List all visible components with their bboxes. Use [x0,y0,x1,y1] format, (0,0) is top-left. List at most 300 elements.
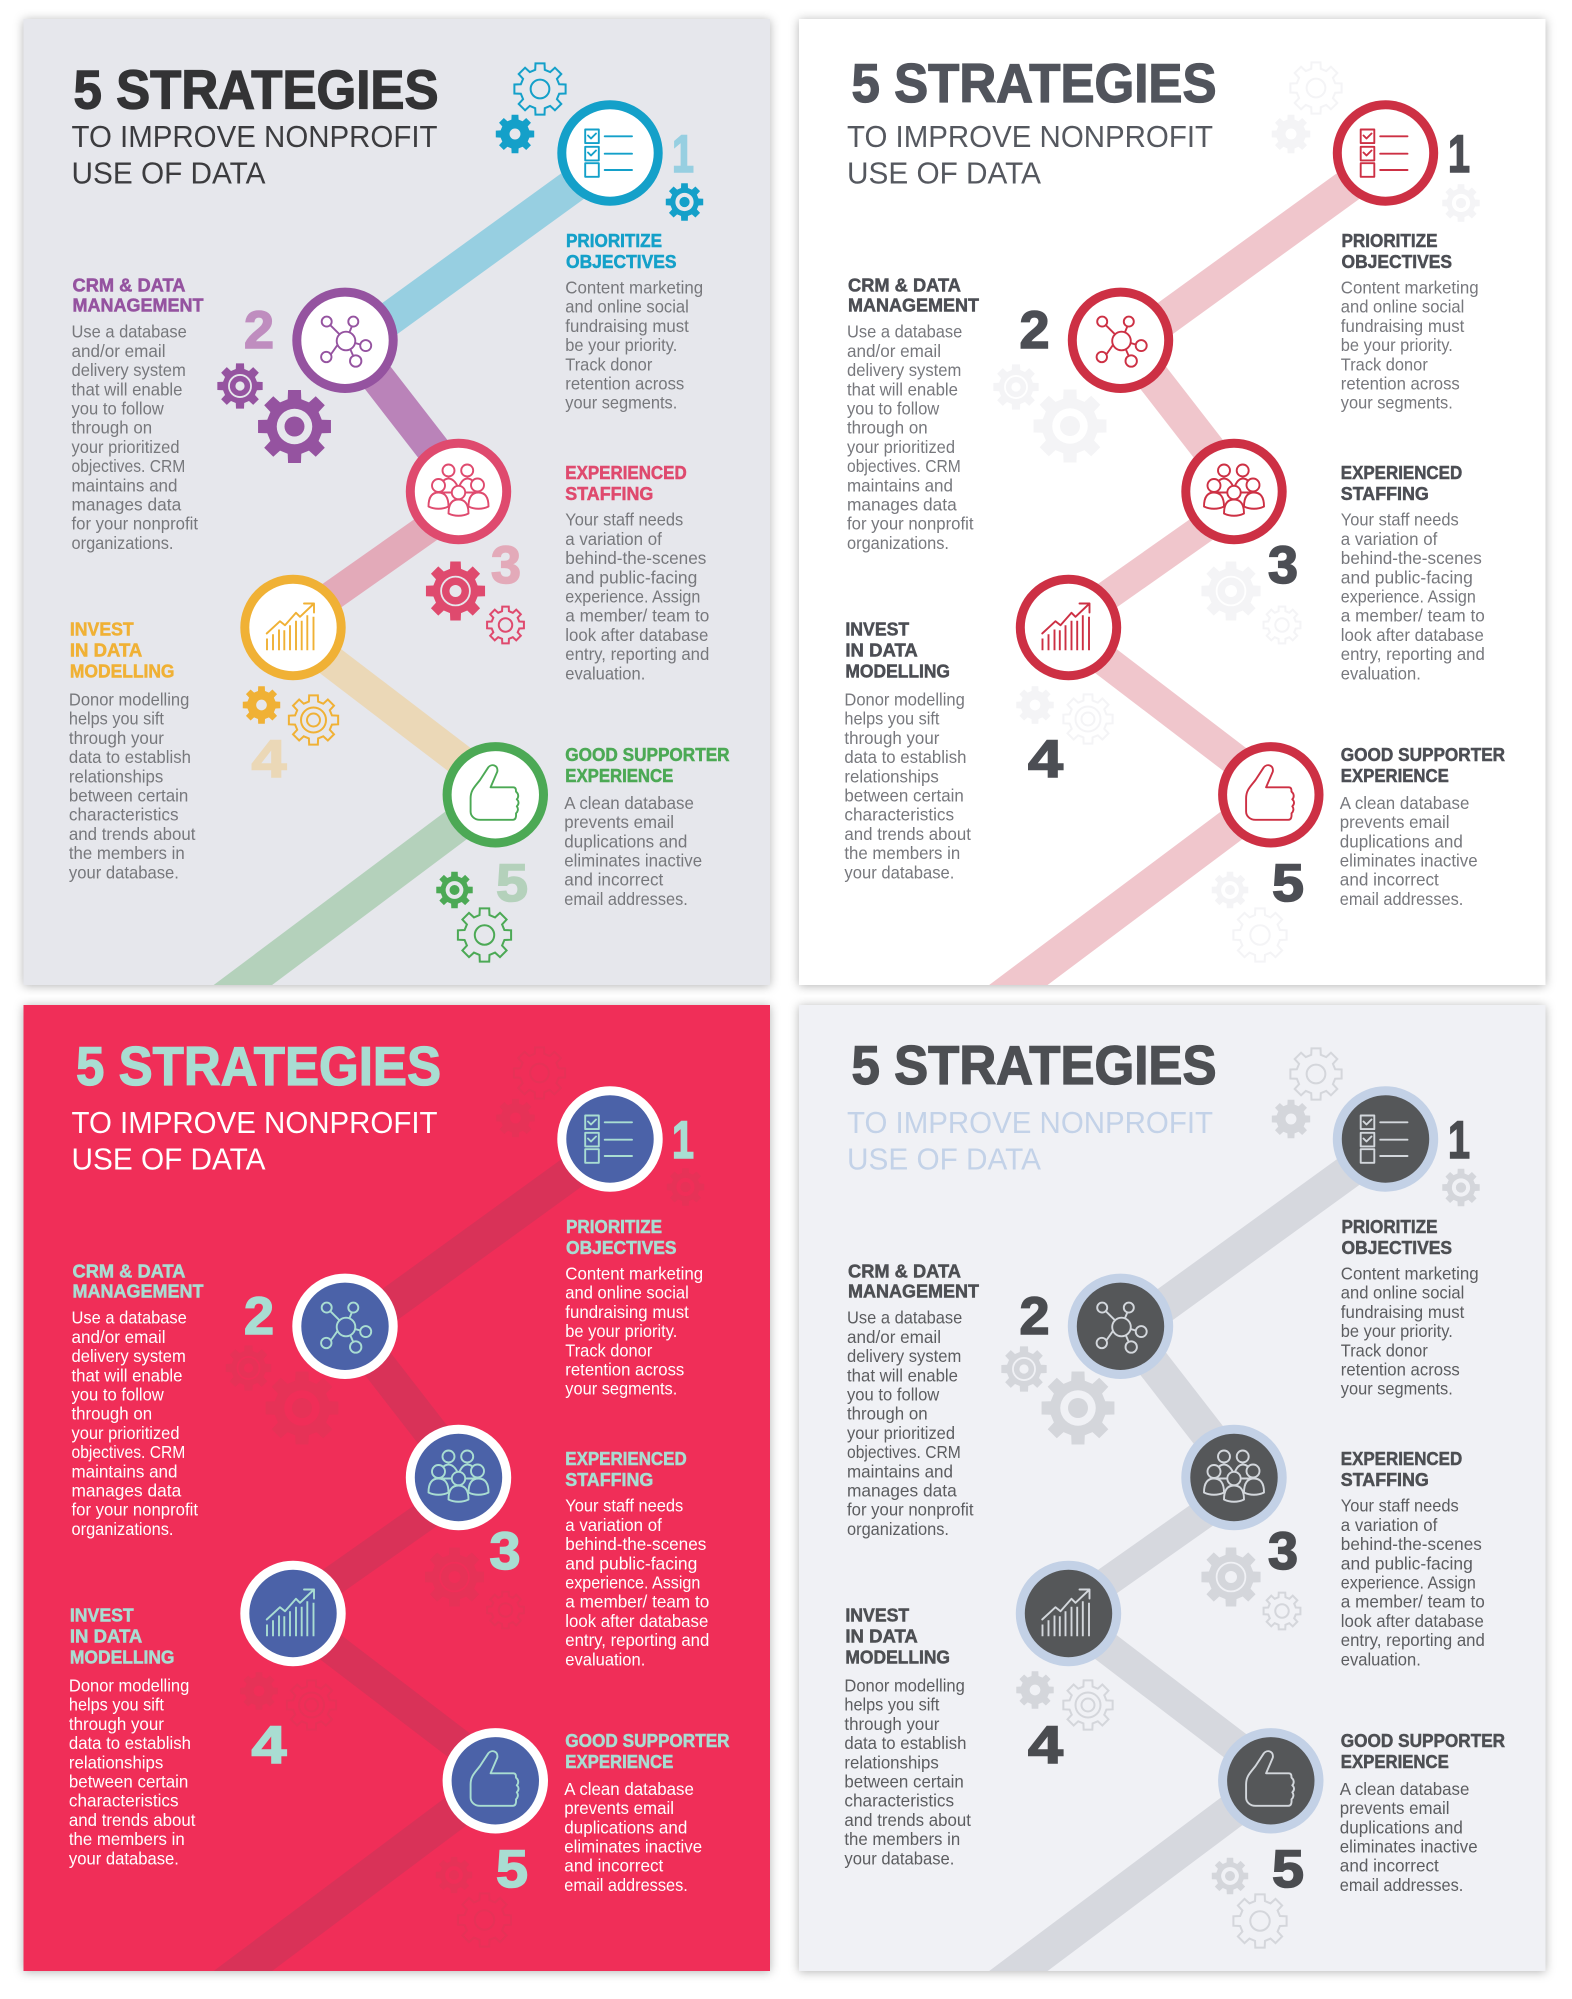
gears 5 [1212,872,1287,962]
road path [214,173,584,985]
subtitle [72,119,438,190]
body: good supporter experience: email addresses. [1340,889,1463,909]
body: invest in data modelling: through your [844,1714,940,1734]
body: prioritize objectives: retention across [1341,374,1460,394]
heading: prioritize objectives: PRIORITIZE [566,231,662,251]
body: CRM and data management: delivery system [72,1346,186,1366]
heading: CRM and data management: MANAGEMENT [848,296,979,316]
body: invest in data modelling: data to establish [69,747,191,767]
body: invest in data modelling: and trends about [844,824,971,844]
body: CRM and data management: organizations. [72,1519,174,1539]
body: prioritize objectives: fundraising must [1341,1302,1464,1322]
number 2: 2 [1020,301,1050,360]
icon: thumbs up [471,1751,519,1806]
heading: experienced staffing: EXPERIENCED [565,463,687,483]
icon: checklist [585,130,632,177]
step 3: experienced staffing [1186,1429,1485,1669]
icon: network [1097,317,1147,367]
body: prioritize objectives: and online social [1341,297,1464,317]
body: invest in data modelling: characteristics [844,805,954,825]
body: CRM and data management: for your nonprofit [72,514,198,534]
gears 4 [243,686,338,745]
body: CRM and data management: manages data [72,1480,181,1500]
body: experienced staffing: experience. Assign [1341,586,1476,606]
heading: experienced staffing [565,463,687,504]
body: invest in data modelling: your database. [844,862,954,882]
body: CRM and data management: you to follow [72,1384,164,1404]
heading: prioritize objectives [1342,231,1452,272]
body: experienced staffing: evaluation. [565,1649,645,1669]
heading: CRM and data management: MANAGEMENT [72,1282,204,1302]
icon: network [321,317,371,367]
icon: thumbs up [1246,1751,1294,1806]
body: CRM and data management: you to follow [847,1384,940,1404]
road path [990,173,1360,985]
body: good supporter experience: email addresses. [564,889,688,909]
body: CRM and data management: and/or email [72,341,166,361]
heading: good supporter experience: EXPERIENCE [1341,766,1449,786]
body: prioritize objectives: Track donor [1341,354,1428,374]
body: experienced staffing: and public-facing [1341,567,1473,587]
body: invest in data modelling [69,1676,196,1868]
gears 3 [425,1547,524,1628]
body: invest in data modelling: Donor modelling [844,1676,965,1696]
gears 3 [1201,561,1300,643]
heading: invest in data modelling: MODELLING [845,1648,950,1668]
body: experienced staffing: experience. Assign [565,586,700,606]
heading: CRM and data management [72,1262,204,1302]
body: experienced staffing: a variation of [565,529,662,549]
body: experienced staffing: and public-facing [1341,1553,1473,1573]
panel: red and white version [799,19,1546,1007]
body: CRM and data management [72,1308,198,1539]
body: CRM and data management [847,322,974,553]
body: prioritize objectives: and online social [565,297,689,317]
heading: good supporter experience: GOOD SUPPORTER [565,1731,730,1751]
number 4: 4 [1028,730,1064,789]
number 4: 4 [252,1716,287,1775]
body: prioritize objectives: be your priority. [565,335,677,355]
panel background [799,19,1546,985]
step 5: good supporter experience [436,745,730,962]
number 1: 1 [1448,1111,1470,1170]
heading: good supporter experience [1341,745,1505,786]
number 4: 4 [1028,1716,1064,1775]
heading: good supporter experience [1341,1731,1505,1772]
heading: experienced staffing [1341,463,1462,504]
heading: good supporter experience [565,745,730,786]
icon: thumbs up [1246,765,1294,820]
body: CRM and data management: objectives. CRM [847,1442,961,1462]
gears 3 [426,561,524,643]
heading: CRM and data management: MANAGEMENT [848,1282,979,1302]
body: experienced staffing: entry, reporting and [1341,1630,1485,1650]
title: 5 STRATEGIES [852,1034,1216,1096]
node circle 2 [297,292,393,388]
subtitle: USE OF DATA [72,1141,266,1176]
number 1: 1 [1448,125,1470,184]
number 3: 3 [491,536,521,595]
number 1: 1 [672,125,694,184]
body: prioritize objectives: Track donor [565,354,652,374]
icon: growth chart [267,604,314,650]
gears 1 [1272,62,1480,222]
heading: CRM and data management: CRM & DATA [848,276,961,296]
body: CRM and data management: you to follow [847,398,940,418]
body: invest in data modelling: Donor modelling [69,690,189,710]
heading: good supporter experience: EXPERIENCE [565,766,673,786]
body: experienced staffing: evaluation. [1341,663,1421,683]
node circle 3 [1186,1429,1282,1526]
gears 1 [1272,1048,1480,1206]
gears 2 [1001,1346,1114,1444]
number 1: 1 [672,1111,694,1170]
body: experienced staffing: a member/ team to [565,1592,709,1612]
panel: crimson and blue version [24,1005,770,1993]
body: invest in data modelling: through your [69,728,164,748]
icon: growth chart [267,1590,314,1636]
body: invest in data modelling: helps you sift [69,709,164,729]
body: experienced staffing: look after database [1341,1611,1484,1631]
step 5: good supporter experience [1212,745,1505,962]
body: prioritize objectives [565,1264,703,1399]
panel: colourful version on grey [24,19,770,1007]
road path [214,1160,584,1971]
title: 5 STRATEGIES [852,52,1216,114]
step 5: good supporter experience [1212,1731,1505,1948]
body: experienced staffing: look after database [565,625,708,645]
body: invest in data modelling: between certain [844,786,964,806]
body: good supporter experience: and incorrect [564,1856,663,1876]
body: invest in data modelling: data to establish [844,747,966,767]
gears 5 [436,1857,511,1947]
heading: CRM and data management: CRM & DATA [72,276,186,296]
body: CRM and data management: organizations. [847,1519,949,1539]
heading: invest in data modelling: IN DATA [845,640,918,660]
body: CRM and data management: that will enable [72,1365,182,1385]
subtitle [847,119,1213,190]
body: prioritize objectives: fundraising must [565,1302,689,1322]
body: good supporter experience: duplications and [1340,1817,1463,1837]
heading: good supporter experience [565,1731,730,1772]
node circle 5 [447,747,544,843]
body: prioritize objectives: Content marketing [565,278,703,298]
node circle 5 [1223,747,1319,843]
subtitle: USE OF DATA [847,1141,1041,1176]
body: CRM and data management: through on [847,418,928,438]
body: invest in data modelling: your database. [844,1848,954,1868]
body: good supporter experience: and incorrect [1340,1856,1439,1876]
heading: experienced staffing: EXPERIENCED [1341,1449,1462,1469]
icon: growth chart [1042,604,1090,650]
body: CRM and data management: manages data [847,494,957,514]
number 5: 5 [496,1840,528,1899]
body: experienced staffing: entry, reporting and [565,1630,709,1650]
heading: experienced staffing: STAFFING [1341,1470,1429,1490]
step 2: CRM and data management [847,1262,1169,1539]
subtitle: USE OF DATA [72,155,266,190]
node circle 4 [1020,579,1117,676]
body: invest in data modelling: data to establish [69,1733,191,1753]
gears 4 [1016,686,1113,744]
body: CRM and data management: and/or email [72,1327,166,1347]
body: good supporter experience: and incorrect [1340,870,1439,890]
heading: good supporter experience: EXPERIENCE [565,1752,673,1772]
body: invest in data modelling: characteristics [69,805,179,825]
heading: invest in data modelling: INVEST [845,1606,909,1626]
body: prioritize objectives: your segments. [1341,393,1453,413]
body: invest in data modelling: and trends about [69,824,196,844]
heading: CRM and data management: CRM & DATA [848,1262,961,1282]
body: CRM and data management: you to follow [72,398,164,418]
body: good supporter experience [1340,793,1478,909]
node circle 5 [1223,1733,1319,1829]
icon: people [1204,464,1264,516]
body: experienced staffing: a variation of [1341,1515,1437,1535]
heading: good supporter experience: GOOD SUPPORTER [1341,745,1505,765]
number 4: 4 [252,730,287,789]
heading: invest in data modelling: INVEST [70,620,134,640]
body: invest in data modelling: through your [69,1714,164,1734]
node circle 2 [1072,1278,1169,1374]
gears 2 [217,363,331,463]
body: experienced staffing: experience. Assign [565,1572,700,1592]
gears 4 [1016,1671,1113,1730]
body: experienced staffing [1341,1496,1485,1669]
step 1: prioritize objectives [496,63,703,413]
body: invest in data modelling: the members in [844,843,960,863]
icon: checklist [585,1116,632,1163]
body: invest in data modelling [69,690,196,882]
body: good supporter experience [564,793,702,909]
body: invest in data modelling: helps you sift [844,1695,940,1715]
subtitle: USE OF DATA [847,155,1041,190]
road path [990,1160,1360,1971]
body: good supporter experience: duplications and [564,1817,687,1837]
node circle 2 [297,1278,393,1374]
step 2: CRM and data management [847,276,1169,553]
body: prioritize objectives: and online social [565,1283,689,1303]
body: invest in data modelling: helps you sift [844,709,940,729]
body: CRM and data management: Use a database [72,322,187,342]
body: good supporter experience: eliminates inactive [1340,1836,1478,1856]
body: invest in data modelling: between certain [844,1772,964,1792]
body: prioritize objectives: your segments. [1341,1379,1453,1399]
body: invest in data modelling: the members in [69,1829,185,1849]
body: invest in data modelling: your database. [69,1848,179,1868]
body: CRM and data management: through on [72,1404,152,1424]
heading: invest in data modelling: INVEST [70,1606,134,1626]
gears 4 [240,1672,336,1730]
body: prioritize objectives: your segments. [565,393,677,413]
body: good supporter experience: email addresses. [1340,1875,1463,1895]
body: experienced staffing: look after database [1341,625,1484,645]
body: CRM and data management: maintains and [72,475,178,495]
panel background [24,19,770,985]
body: CRM and data management: delivery system [847,360,961,380]
node circle 1 [1337,1091,1434,1187]
body: invest in data modelling: Donor modelling [69,1676,189,1696]
icon: people [1204,1450,1264,1502]
number 2: 2 [244,301,274,360]
body: good supporter experience: duplications and [564,831,687,851]
body: invest in data modelling: the members in [844,1829,960,1849]
body: CRM and data management: maintains and [847,475,953,495]
step 4: invest in data modelling [844,1565,1117,1868]
body: experienced staffing: look after database [565,1611,708,1631]
body: invest in data modelling: relationships [69,1752,164,1772]
body: CRM and data management: Use a database [847,322,962,342]
body: experienced staffing: a member/ team to [1341,606,1485,626]
body: invest in data modelling: data to establish [844,1733,966,1753]
body: CRM and data management: delivery system [72,360,186,380]
body: CRM and data management: organizations. [847,533,949,553]
body: good supporter experience: A clean database [564,1779,694,1799]
step 1: prioritize objectives [1272,1048,1480,1399]
body: invest in data modelling: your database. [69,862,179,882]
icon: thumbs up [471,765,519,820]
step 4: invest in data modelling [69,1565,341,1868]
body: CRM and data management: objectives. CRM [72,456,185,476]
gears 5 [436,872,511,962]
body: prioritize objectives: fundraising must [565,316,689,336]
body: experienced staffing: entry, reporting and [565,644,709,664]
body: CRM and data management: Use a database [72,1308,187,1328]
heading: good supporter experience: GOOD SUPPORTER [1341,1731,1505,1751]
body: good supporter experience: prevents email [1340,812,1450,832]
node circle 4 [1020,1565,1117,1662]
body: invest in data modelling: and trends about [844,1810,971,1830]
number 2: 2 [1020,1287,1050,1346]
title: 5 STRATEGIES [74,58,438,120]
body: prioritize objectives [565,278,703,413]
body: prioritize objectives: and online social [1341,1283,1464,1303]
body: experienced staffing: Your staff needs [565,510,684,530]
body: good supporter experience [1340,1779,1478,1895]
gears 2 [993,364,1106,462]
gears 5 [1212,1858,1287,1948]
heading: prioritize objectives: PRIORITIZE [1342,231,1438,251]
body: experienced staffing [1341,510,1485,683]
body: invest in data modelling: through your [844,728,940,748]
heading: invest in data modelling: IN DATA [70,1626,142,1646]
heading: invest in data modelling: IN DATA [70,640,142,660]
body: prioritize objectives: retention across [1341,1360,1460,1380]
step 3: experienced staffing [410,443,709,683]
body: prioritize objectives [1341,278,1479,413]
body: good supporter experience: A clean database [1340,793,1469,813]
body: CRM and data management: manages data [847,1480,957,1500]
body: invest in data modelling: relationships [69,766,164,786]
body: invest in data modelling: helps you sift [69,1695,164,1715]
body: CRM and data management: that will enable [72,379,182,399]
number 3: 3 [1268,1522,1298,1581]
number 5: 5 [1272,1840,1304,1899]
heading: good supporter experience: EXPERIENCE [1341,1752,1449,1772]
body: CRM and data management: your prioritized [847,1423,955,1443]
body: good supporter experience: eliminates inactive [1340,850,1478,870]
body: prioritize objectives: Content marketing [565,1264,703,1284]
step 3: experienced staffing [410,1429,709,1669]
heading: experienced staffing [565,1449,687,1490]
heading: prioritize objectives: PRIORITIZE [566,1217,662,1237]
heading: experienced staffing: EXPERIENCED [565,1449,687,1469]
panel background [799,1005,1546,1971]
body: prioritize objectives: your segments. [565,1379,677,1399]
number 5: 5 [496,854,528,913]
body: CRM and data management: that will enable [847,379,958,399]
body: experienced staffing: a variation of [1341,529,1437,549]
heading: invest in data modelling [70,1606,174,1668]
body: experienced staffing: experience. Assign [1341,1572,1476,1592]
body: CRM and data management: organizations. [72,533,174,553]
node circle 3 [1186,443,1282,540]
body: experienced staffing: a variation of [565,1515,662,1535]
body: experienced staffing: behind-the-scenes [565,548,707,568]
step 4: invest in data modelling [69,579,341,882]
body: good supporter experience: duplications and [1340,831,1463,851]
body: good supporter experience: prevents email [564,1798,674,1818]
body: experienced staffing: a member/ team to [1341,1592,1485,1612]
body: prioritize objectives: Content marketing [1341,278,1479,298]
step 2: CRM and data management [72,1262,393,1539]
body: CRM and data management: your prioritized [72,437,180,457]
body: invest in data modelling: relationships [844,766,939,786]
body: prioritize objectives: be your priority. [1341,335,1453,355]
step 1: prioritize objectives [1272,62,1480,413]
heading: prioritize objectives: OBJECTIVES [566,252,676,272]
body: experienced staffing: and public-facing [565,567,697,587]
number 5: 5 [1272,854,1304,913]
body: good supporter experience: A clean database [1340,1779,1469,1799]
body: good supporter experience: A clean database [564,793,694,813]
body: CRM and data management: objectives. CRM [72,1442,185,1462]
body: invest in data modelling: relationships [844,1752,939,1772]
subtitle [72,1105,438,1176]
body: CRM and data management [847,1308,974,1539]
step 5: good supporter experience [436,1731,730,1947]
body: invest in data modelling: characteristics [69,1791,179,1811]
subtitle: TO IMPROVE NONPROFIT [72,119,438,154]
heading: invest in data modelling: MODELLING [845,662,950,682]
heading: CRM and data management [72,276,204,316]
node circle 1 [1337,105,1434,201]
heading: invest in data modelling [70,620,174,682]
gears 1 [496,63,703,221]
body: invest in data modelling [844,690,971,882]
body: invest in data modelling: Donor modelling [844,690,965,710]
heading: experienced staffing [1341,1449,1462,1490]
body: experienced staffing: evaluation. [565,663,645,683]
node circle 2 [1072,292,1169,388]
body: experienced staffing: behind-the-scenes [1341,1534,1482,1554]
subtitle [847,1105,1213,1176]
heading: prioritize objectives [1342,1217,1452,1258]
subtitle: TO IMPROVE NONPROFIT [847,1105,1213,1140]
body: experienced staffing: behind-the-scenes [1341,548,1482,568]
heading: experienced staffing: STAFFING [565,1470,653,1490]
body: prioritize objectives: Track donor [1341,1340,1428,1360]
step 1: prioritize objectives [496,1047,704,1399]
heading: CRM and data management [848,276,979,316]
heading: CRM and data management [848,1262,979,1302]
body: invest in data modelling: the members in [69,843,185,863]
body: invest in data modelling: and trends about [69,1810,196,1830]
gears 1 [496,1047,704,1206]
body: invest in data modelling: characteristics [844,1791,954,1811]
body: prioritize objectives [1341,1264,1479,1399]
body: CRM and data management: maintains and [847,1461,953,1481]
